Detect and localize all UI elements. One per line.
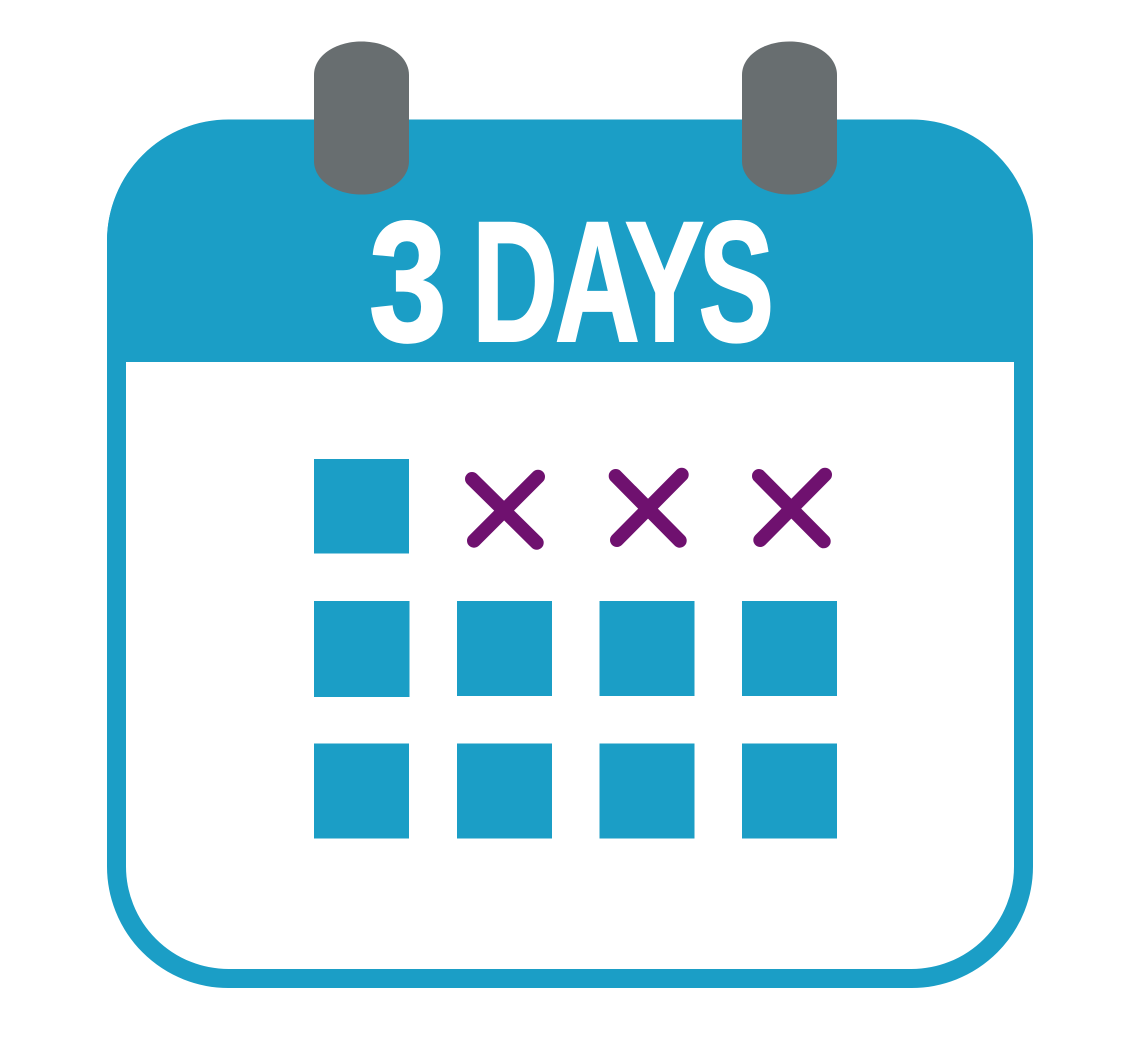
row 2 day squares: [314, 601, 837, 697]
heading: 3 DAYS: S: [699, 187, 774, 378]
heading: 3 DAYS: D: [472, 187, 558, 378]
cross 2: [616, 475, 682, 541]
cross 3: [759, 475, 825, 541]
heading: 3 DAYS: A: [555, 187, 640, 378]
row 3 day squares: [314, 744, 837, 838]
day grid: [314, 459, 837, 838]
purple crosses: [472, 475, 825, 543]
binding ring left: [314, 42, 409, 194]
heading: 3 DAYS: Y: [625, 187, 704, 378]
binding ring right: [742, 42, 837, 194]
row 1 day square: [314, 459, 409, 554]
cross 1: [472, 477, 538, 543]
calendar body: [107, 120, 1032, 978]
heading: 3 DAYS: 3: [369, 187, 447, 378]
